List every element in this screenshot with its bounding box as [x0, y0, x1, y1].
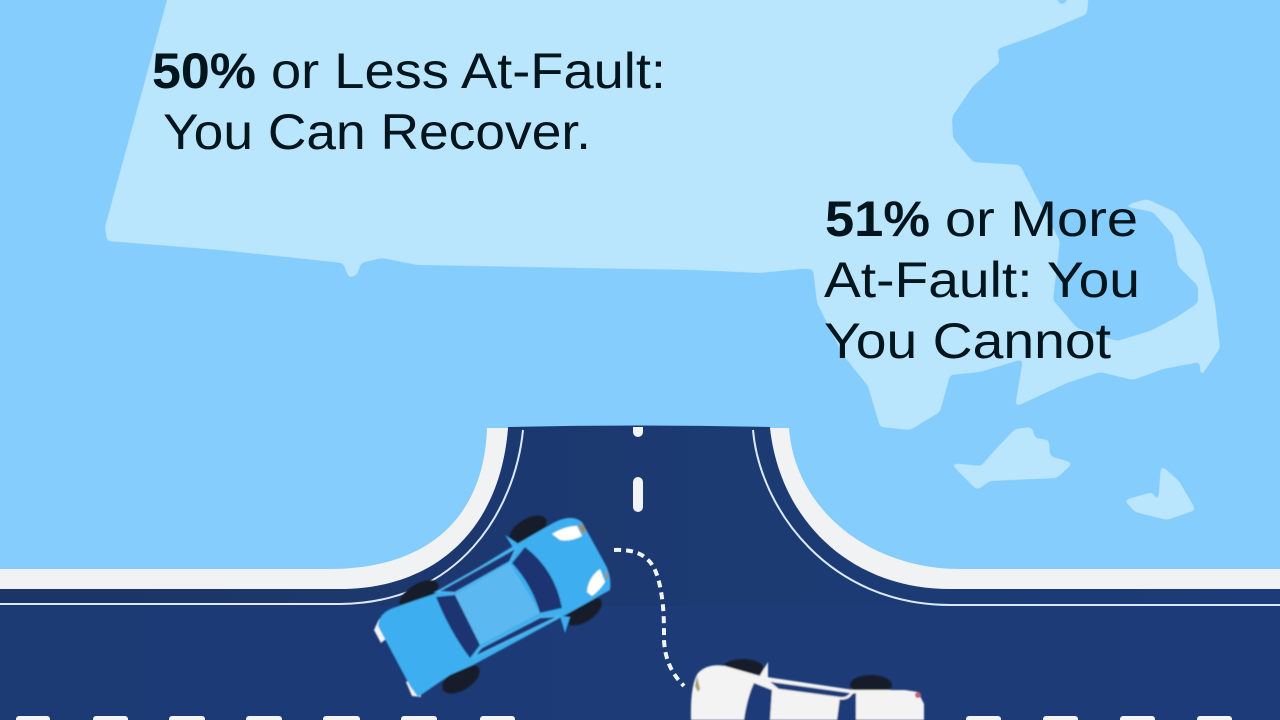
second line: You Can Recover. [163, 104, 591, 160]
wheels [722, 659, 764, 679]
text: 50% or less [152, 43, 666, 160]
car body [691, 665, 924, 720]
text: 51% or more [824, 191, 1140, 369]
headlight [695, 676, 700, 692]
dotted path of travel [614, 550, 684, 686]
crosswalk stripes [16, 716, 1232, 720]
wheels [395, 510, 607, 699]
headlight trim [578, 524, 609, 580]
left curb [0, 428, 508, 589]
headlights [552, 526, 582, 540]
Martha's Vineyard [950, 427, 1073, 490]
first line: 51% [825, 191, 930, 247]
tail light [915, 692, 921, 698]
road intersection [0, 426, 1280, 720]
rear window [837, 693, 856, 720]
Nantucket [1124, 465, 1196, 520]
right lane line [753, 430, 1280, 605]
map of Massachusetts [105, 0, 1220, 520]
front windshield [744, 683, 772, 720]
roof [455, 563, 540, 645]
car body [378, 518, 610, 697]
side window top [437, 547, 517, 593]
text: 51% or more: or More [945, 191, 1138, 247]
centre dash [633, 477, 643, 512]
blue car [374, 510, 610, 699]
side window bottom [475, 616, 560, 657]
tail lights [374, 619, 387, 643]
lower carriageway [0, 606, 1280, 720]
right curb [770, 428, 1280, 589]
mirrors [505, 535, 570, 633]
third line: You Cannot [824, 313, 1111, 369]
mirror [759, 662, 768, 680]
first line: 50% [152, 43, 256, 99]
white car [691, 659, 924, 720]
side window [766, 680, 852, 698]
road surface [0, 426, 1280, 720]
mainland and Cape Cod [105, 0, 1220, 430]
front windshield [512, 547, 562, 613]
second line: At-Fault: You [824, 252, 1140, 308]
left lane line [0, 430, 523, 604]
text: 50% or less: or Less At-Fault: [271, 43, 666, 99]
centre dash top [633, 427, 643, 437]
rear window [436, 595, 480, 658]
